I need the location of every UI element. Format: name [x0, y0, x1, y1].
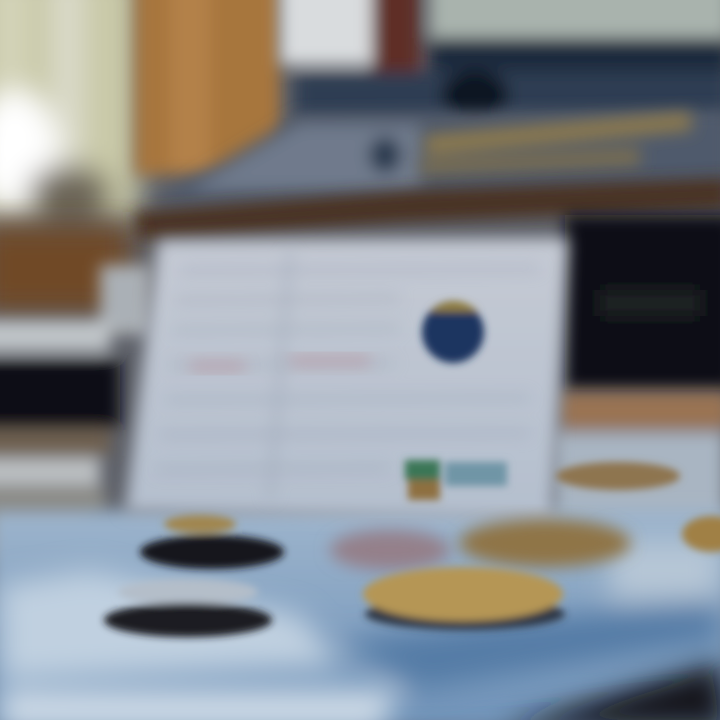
grey roof shape [150, 110, 720, 205]
background: wooden curtain [135, 0, 280, 175]
small color marks [405, 460, 507, 500]
muted red figures [190, 356, 370, 371]
table cloth [0, 510, 720, 720]
report card [125, 238, 568, 520]
dark disc front [104, 579, 272, 637]
golden cookie front [363, 567, 565, 630]
dark stacked disc upper [140, 515, 284, 569]
left brown block [0, 225, 130, 313]
gold strips on roof [420, 112, 692, 175]
right tan and pale band [555, 392, 720, 542]
right dark block [565, 215, 720, 390]
golden cookie back [459, 519, 631, 567]
cookie: right small [556, 462, 680, 490]
cookie: far right [682, 516, 720, 552]
left stack: white and dark mug [0, 265, 150, 558]
pink disc [330, 530, 450, 570]
table rows on card [155, 250, 540, 500]
brown shelf bar [135, 178, 720, 240]
background: window [0, 0, 140, 225]
donut icon [422, 301, 484, 363]
background: top right wall and dark band [280, 0, 720, 119]
